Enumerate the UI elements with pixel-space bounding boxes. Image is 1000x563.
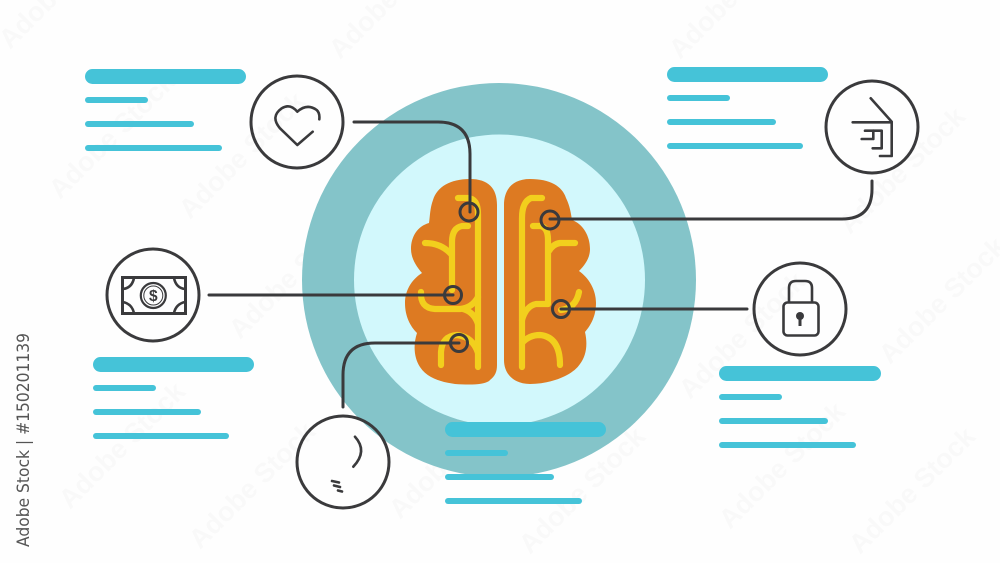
left neural lines <box>421 198 478 367</box>
watermark pattern: Adobe Stock <box>383 386 522 524</box>
icon: heart <box>251 76 343 168</box>
text panel: top left <box>85 69 246 151</box>
watermark pattern: Adobe Stock <box>223 206 362 344</box>
right neural lines <box>522 198 579 367</box>
watermark pattern: Adobe Stock <box>53 376 192 514</box>
outer teal ring <box>302 83 696 477</box>
text panel: lower right <box>719 366 881 448</box>
watermark pattern: Adobe Stock <box>173 86 312 224</box>
watermark pattern: Adobe Stock <box>833 101 972 239</box>
watermark pattern: Adobe Stock <box>513 421 652 559</box>
inner light circle <box>354 134 645 426</box>
icon: money <box>107 249 199 341</box>
text panel: top right <box>667 67 828 149</box>
watermark pattern: Adobe Stock <box>673 266 812 404</box>
connector: money to brain <box>209 286 462 304</box>
connector: heart to brain <box>354 122 478 221</box>
icon: lock <box>754 263 846 355</box>
connector: bottom icon to brain <box>343 334 468 407</box>
watermark pattern: Adobe Stock <box>713 396 852 534</box>
watermark pattern: Adobe Stock <box>843 421 982 559</box>
watermark pattern: Adobe Stock <box>183 416 322 554</box>
text panel: bottom center <box>445 422 606 504</box>
brain <box>405 179 596 385</box>
icon: bottom partial circle <box>297 416 389 508</box>
left hemisphere <box>405 179 497 385</box>
watermark pattern: Adobe Stock <box>43 66 182 204</box>
icon: money: $ <box>149 288 158 305</box>
connector: lock to brain <box>552 300 747 318</box>
icon: hand <box>826 81 918 173</box>
text panel: lower left <box>93 357 254 439</box>
side credit text: Adobe Stock | #150201139 <box>14 333 33 547</box>
connector: hand to brain <box>541 181 872 229</box>
right hemisphere <box>504 179 596 384</box>
